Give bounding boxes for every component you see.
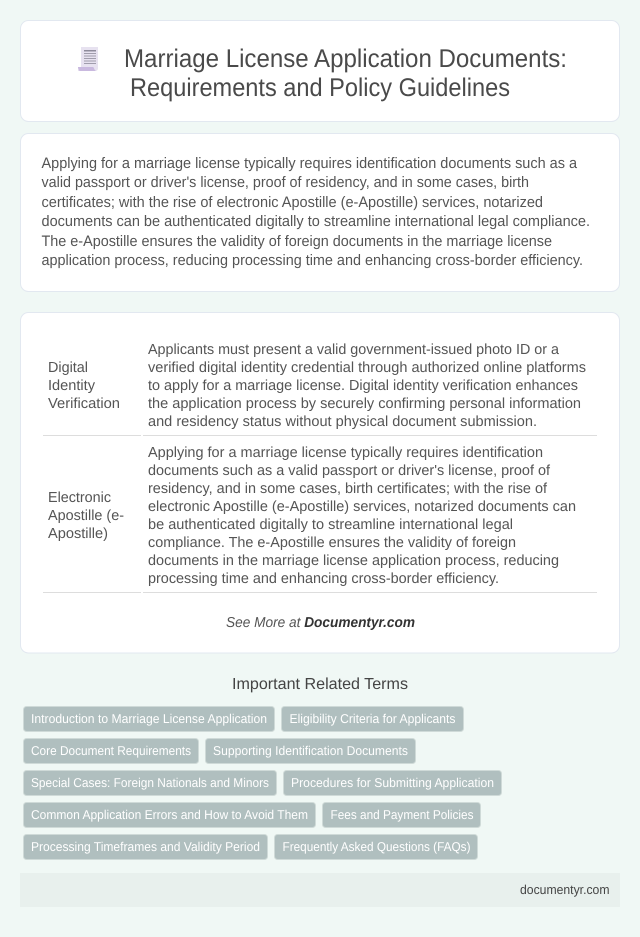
title: Marriage License Application Documents: xyxy=(124,45,567,73)
intro paragraph: documents can be authenticated digitally to streamline international legal compliance. xyxy=(42,213,590,230)
row text: electronic apostille: processing time and enhancing cross-border efficiency. xyxy=(148,571,499,587)
title: Requirements and Policy Guidelines xyxy=(130,74,510,102)
tag xyxy=(282,706,464,732)
table row: electronic apostille xyxy=(48,445,576,587)
row label: electronic apostille xyxy=(48,490,124,542)
tag: Processing Timeframes and Validity Period xyxy=(31,839,260,854)
intro paragraph: certificates; with the rise of electronic Apostille (e-Apostille) services, notarized xyxy=(42,194,543,211)
intro paragraph xyxy=(42,155,590,269)
icon: document scroll xyxy=(78,47,98,71)
table row: digital identity verification xyxy=(48,342,586,430)
footer: documentyr.com xyxy=(520,882,610,897)
tag: Supporting Identification Documents xyxy=(213,743,408,758)
heading: important related terms: Important Related Terms xyxy=(232,676,408,693)
footer xyxy=(20,873,620,907)
tag xyxy=(322,802,480,828)
row text: electronic apostille: electronic Apostille (e-Apostille) services, notarized documents can xyxy=(148,499,576,515)
tag: Eligibility Criteria for Applicants xyxy=(290,711,456,726)
row text: electronic apostille: compliance. The e-Apostille ensures the validity of foreign xyxy=(148,535,516,551)
panel: introduction xyxy=(20,134,620,292)
tag: Frequently Asked Questions (FAQs) xyxy=(282,839,470,854)
title xyxy=(124,45,567,102)
row text: digital identity verification xyxy=(148,342,586,430)
tag xyxy=(274,834,478,860)
row text: digital identity verification: the application process by securely confirming personal information xyxy=(148,396,581,412)
row text: digital identity verification: to apply for a marriage license. Digital identity verification enhances xyxy=(148,378,578,394)
row text: electronic apostille: documents such as a valid passport or driver's license, proof of xyxy=(148,463,551,479)
row label: digital identity verification xyxy=(48,360,120,412)
tag xyxy=(284,770,502,796)
row text: digital identity verification: verified digital identity credential through authorized online platforms xyxy=(148,360,586,376)
row label: electronic apostille: Apostille (e- xyxy=(48,508,124,524)
row label: digital identity verification: Identity xyxy=(48,378,96,394)
row label: electronic apostille: Apostille) xyxy=(48,526,108,542)
tag xyxy=(24,738,198,764)
row text: electronic apostille xyxy=(148,445,576,587)
row text: digital identity verification: and residency status without physical document submission. xyxy=(148,414,537,430)
intro paragraph: valid passport or driver's license, proof of residency, and in some cases, birth xyxy=(42,174,529,191)
row label: digital identity verification: Verification xyxy=(48,396,120,412)
intro paragraph: The e-Apostille ensures the validity of foreign documents in the marriage license xyxy=(42,233,552,250)
intro paragraph: Applying for a marriage license typically requires identification documents such as a xyxy=(42,155,578,172)
tag xyxy=(24,770,276,796)
tag: Procedures for Submitting Application xyxy=(291,775,494,790)
panel: document table xyxy=(20,312,620,653)
tag: Introduction to Marriage License Application xyxy=(31,711,267,726)
row text: digital identity verification: Applicants must present a valid government-issued photo ID or a xyxy=(148,342,560,358)
see more link: See More at Documentyr.com xyxy=(226,615,415,631)
tag: Common Application Errors and How to Avoid Them xyxy=(31,807,308,822)
row text: electronic apostille: residency, and in some cases, birth certificates; with the rise of xyxy=(148,481,548,497)
tag xyxy=(24,802,316,828)
row label: digital identity verification: Digital xyxy=(48,360,88,376)
tag: Core Document Requirements xyxy=(31,743,191,758)
intro paragraph: application process, reducing processing time and enhancing cross-border efficiency. xyxy=(42,252,583,269)
row text: electronic apostille: Applying for a marriage license typically requires identification xyxy=(148,445,543,461)
row label: electronic apostille: Electronic xyxy=(48,490,111,506)
panel: title card xyxy=(20,20,620,122)
tag: Special Cases: Foreign Nationals and Minors xyxy=(31,775,269,790)
tag xyxy=(24,706,274,732)
tag xyxy=(206,738,416,764)
tag: Fees and Payment Policies xyxy=(330,807,474,822)
row text: electronic apostille: be authenticated digitally to streamline international legal xyxy=(148,517,513,533)
related term tags xyxy=(24,706,502,860)
tag xyxy=(24,834,268,860)
row text: electronic apostille: documents in the marriage license application process, reducing xyxy=(148,553,559,569)
